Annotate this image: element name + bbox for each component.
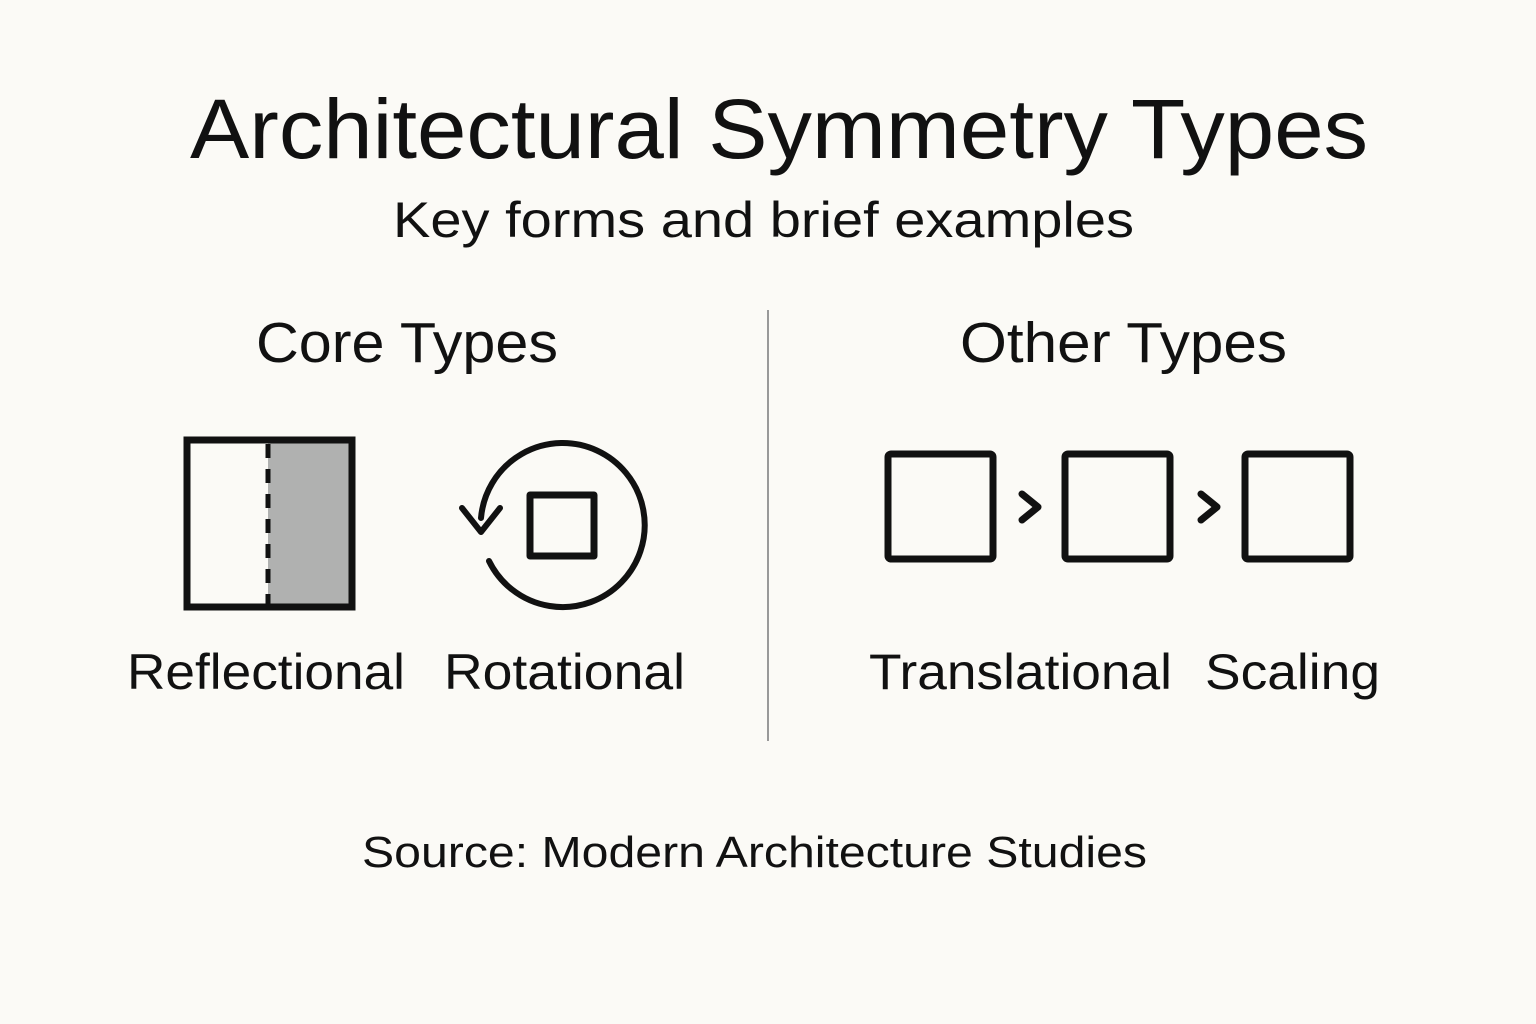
source: Source: Modern Architecture Studies — [362, 828, 1147, 877]
label: translational: Translational — [869, 644, 1172, 700]
panel: core types — [127, 311, 685, 700]
divider — [767, 310, 769, 741]
heading: core types: Core Types — [256, 311, 558, 375]
label: reflectional: Reflectional — [127, 644, 405, 700]
icon: translational squares — [888, 454, 1350, 559]
icon: reflectional — [187, 440, 352, 607]
label: scaling: Scaling — [1205, 644, 1380, 700]
heading: other types: Other Types — [960, 311, 1287, 375]
icon: rotational — [462, 443, 645, 607]
panel: other types — [869, 311, 1380, 700]
label: rotational: Rotational — [444, 644, 685, 700]
title: Architectural Symmetry Types — [190, 82, 1368, 176]
subtitle: Key forms and brief examples — [393, 192, 1134, 248]
